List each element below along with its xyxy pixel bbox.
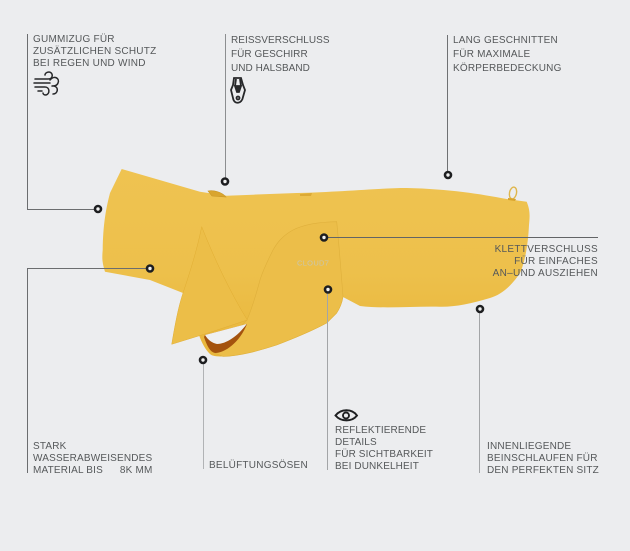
pocket strap [215,222,343,356]
text: long cut [453,34,562,74]
inner lining [204,324,247,353]
text: long cut: FÜR MAXIMALE [453,49,530,60]
text: leg loops: INNENLIEGENDE [487,441,571,452]
text: elastic: BEI REGEN UND WIND [33,58,146,68]
text: material [33,441,152,476]
text: leg loops: DEN PERFEKTEN SITZ [487,465,599,476]
text: elastic: ZUSÄTZLICHEN SCHUTZ [33,46,156,56]
neck and body [102,169,530,356]
icon: zipper [231,78,245,103]
text: zipper: UND HALSBAND [231,63,310,74]
icon: eye [336,410,357,420]
text: zipper: FÜR GESCHIRR [231,49,308,60]
text: reflective: REFLEKTIERENDE [335,425,426,436]
text: reflective: FÜR SICHTBARKEIT [335,449,433,460]
icon: wind [34,72,58,95]
text: zipper [231,34,330,74]
text: velcro: KLETTVERSCHLUSS [495,244,598,255]
logo: CLOUD7 [297,258,329,268]
leg opening [205,324,247,344]
text: reflective: DETAILS [335,437,377,448]
callout lines [28,34,598,473]
text: long cut: KÖRPERBEDECKUNG [453,63,562,74]
text: reflective [335,425,433,472]
text: material: STARK [33,441,66,452]
text: velcro: AN–UND AUSZIEHEN [493,268,598,279]
text: elastic: GUMMIZUG FÜR [33,34,115,44]
coat [102,169,530,356]
text: reflective: BEI DUNKELHEIT [335,461,419,472]
text: velcro [492,244,598,279]
text: leg loops: BEINSCHLAUFEN FÜR [487,453,598,464]
text: material: MATERIAL BIS 8K MM [33,465,152,476]
chest flap [172,227,247,344]
text: leg loops [487,441,599,476]
text: elastic [33,34,156,68]
text: material: WASSERABWEISENDES [33,453,152,464]
callout dots [95,172,483,363]
text: eyelets: BELÜFTUNGSÖSEN [209,460,308,471]
text: zipper: REISSVERSCHLUSS [231,34,330,46]
zipper and loops [208,191,226,197]
text: long cut: LANG GESCHNITTEN [453,34,558,46]
text: velcro: FÜR EINFACHES [514,256,598,267]
